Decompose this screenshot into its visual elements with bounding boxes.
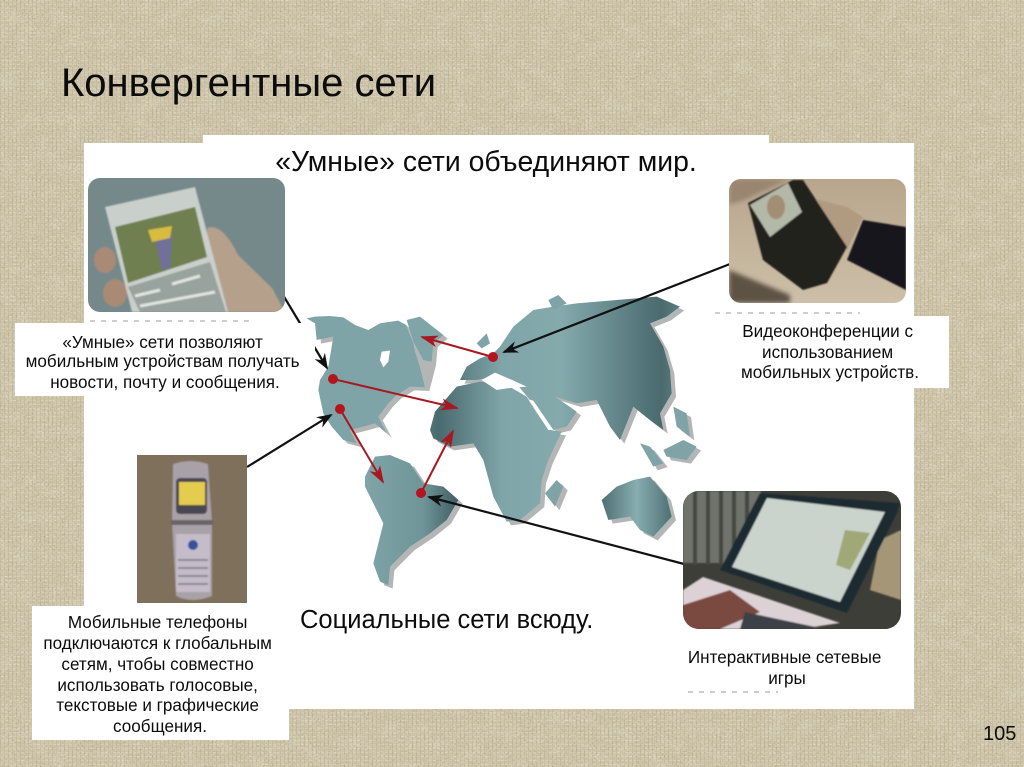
callout: video conferencing [710, 316, 949, 388]
Eurasia [460, 297, 680, 440]
callout: mobile phones [32, 606, 289, 740]
callout: mobile phones: текстовые и графические [56, 696, 259, 715]
callout: smart networks [15, 323, 315, 396]
callout: video conferencing: использованием [762, 343, 893, 362]
Mediterranean [482, 373, 527, 390]
callout: smart networks: «Умные» сети позволяют [62, 333, 263, 352]
callout: video conferencing: мобильных устройств. [741, 363, 919, 382]
photo: flip phone [137, 455, 247, 603]
white content panel [84, 143, 914, 709]
Red Sea [528, 399, 553, 430]
Australia [602, 477, 672, 537]
islands [477, 295, 697, 507]
map shadow [319, 300, 701, 589]
caption: interactive games: игры [768, 669, 806, 688]
callout: mobile phones: использовать голосовые, [57, 676, 258, 695]
page number: 105 [983, 723, 1016, 745]
callout: mobile phones: сообщения. [113, 717, 207, 736]
callout: smart networks: новости, почту и сообщения. [50, 373, 280, 392]
world map [307, 295, 701, 589]
callout: smart networks: мобильным устройствам получать [26, 352, 300, 371]
Africa [430, 382, 562, 522]
South America [365, 455, 458, 585]
photo: laptop [683, 491, 901, 629]
title: Конвергентные сети [61, 61, 436, 105]
scan artefacts under photos [90, 313, 860, 692]
North America [307, 316, 425, 443]
photo: video call handset [729, 179, 906, 303]
black pointer arrows [247, 264, 730, 564]
subtitle box [203, 135, 769, 179]
photo: smartphone with football video [88, 178, 285, 312]
Greenland [407, 317, 443, 362]
subtitle box: «Умные» сети объединяют мир. [275, 146, 697, 178]
callout: video conferencing: Видеоконференции с [742, 322, 913, 341]
Hudson Bay [380, 351, 390, 367]
caption: interactive games: Интерактивные сетевые [688, 648, 881, 667]
caption: social networks: Социальные сети всюду. [300, 606, 593, 634]
red connection arrows [328, 337, 498, 498]
callout: mobile phones: сетям, чтобы совместно [61, 655, 254, 674]
callout: mobile phones: подключаются к глобальным [43, 634, 272, 653]
callout: mobile phones: Мобильные телефоны [68, 613, 247, 632]
